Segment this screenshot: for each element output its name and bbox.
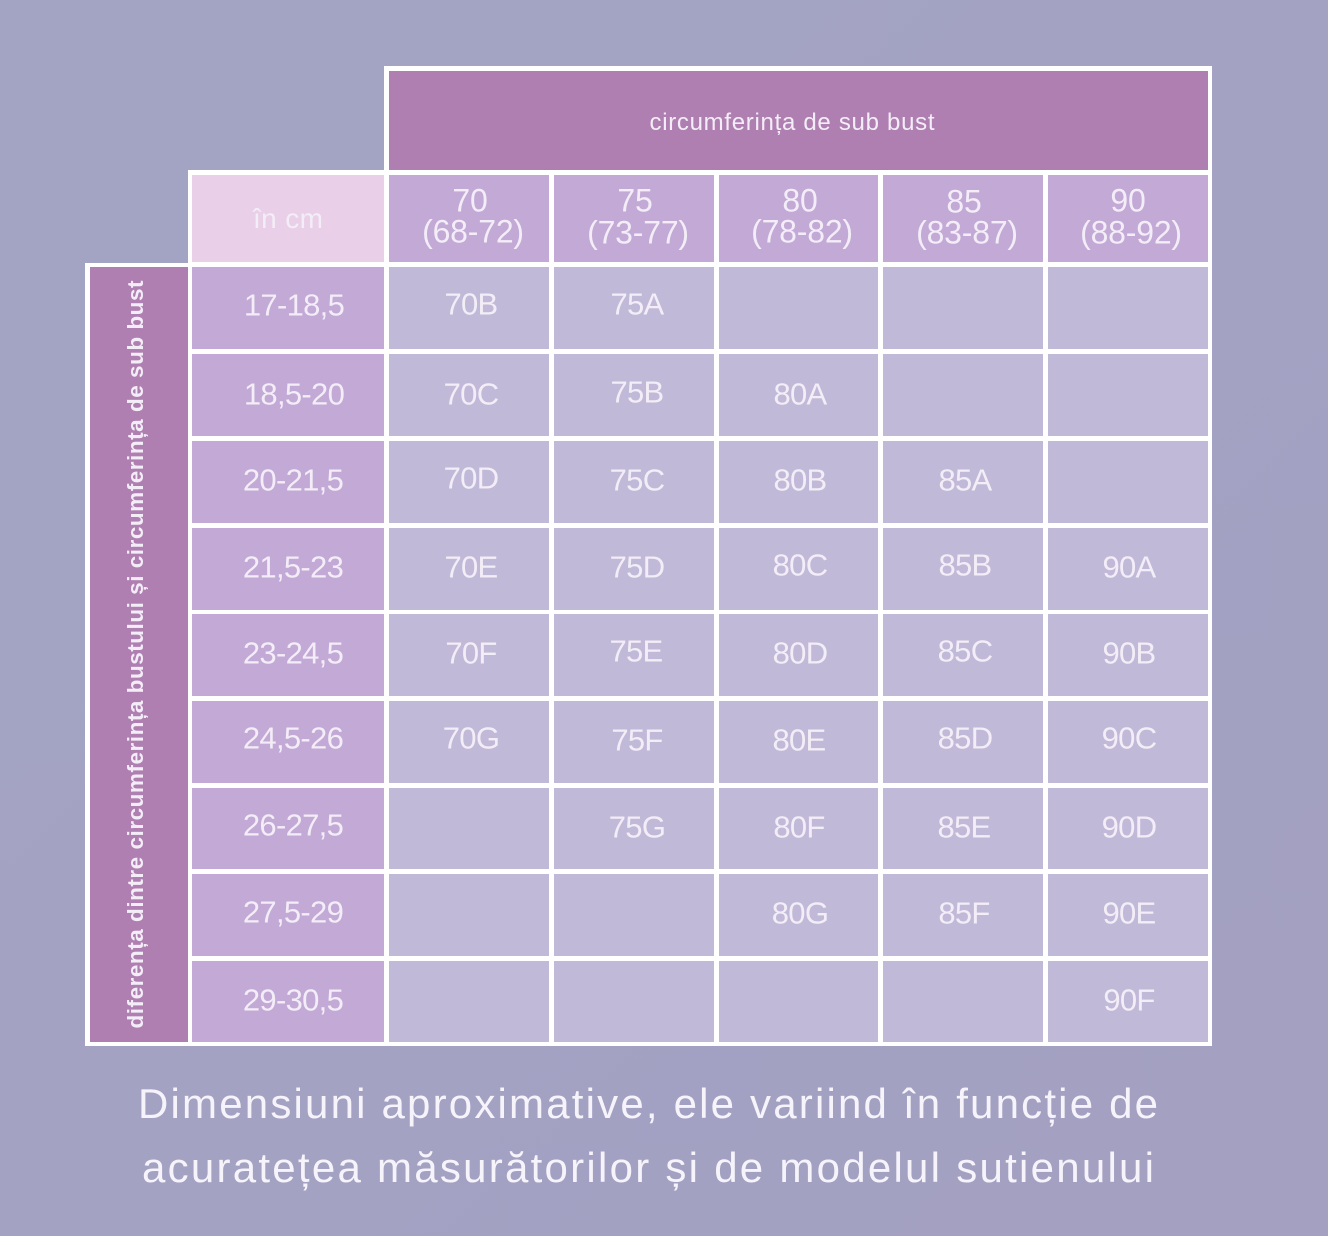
row 29-30,5: [192, 961, 1208, 1042]
corner cell: în cm: [192, 175, 384, 262]
row 17-18,5: 70B: [444, 286, 498, 321]
header: circumferința de sub bust: circumferința de sub bust: [650, 109, 935, 136]
row 24,5-26: 85D: [938, 720, 992, 755]
row 21,5-23: 75D: [610, 549, 664, 584]
row 20-21,5: [192, 441, 1208, 523]
column header: 70: (68-72): [422, 213, 524, 249]
row 21,5-23: 90A: [1102, 549, 1157, 584]
column header: 85: 85: [946, 183, 982, 219]
column header: 80: (78-82): [751, 213, 853, 249]
column header: 85: [883, 175, 1043, 262]
corner cell: în cm: în cm: [252, 203, 323, 234]
side header: diferența dintre circumferința bustului și circumferința de sub bust: diferența dintre circumferința bustului și circumferința de sub bust: [123, 280, 148, 1028]
row 24,5-26: 24,5-26: [243, 720, 343, 755]
column header: 75: (73-77): [587, 214, 689, 250]
row 18,5-20: 75B: [610, 374, 664, 409]
row 23-24,5: 23-24,5: [243, 635, 343, 670]
row 23-24,5: 85C: [938, 633, 993, 668]
row 18,5-20: 18,5-20: [244, 376, 345, 411]
row 17-18,5: 75A: [610, 286, 665, 321]
side header: diferența dintre circumferința bustului și circumferința de sub bust: [90, 267, 188, 1042]
column header: 70: 70: [452, 182, 488, 218]
row 21,5-23: 85B: [938, 547, 992, 582]
header: circumferința de sub bust: [389, 71, 1208, 170]
row 18,5-20: 70C: [444, 376, 499, 411]
row 27,5-29: 85F: [938, 895, 990, 930]
row 23-24,5: [192, 614, 1208, 696]
row 26-27,5: 26-27,5: [243, 807, 343, 842]
column header: 80: 80: [782, 182, 818, 218]
row 26-27,5: 80F: [773, 809, 825, 844]
row 29-30,5: 90F: [1103, 982, 1155, 1017]
row 23-24,5: 90B: [1102, 635, 1156, 670]
row 27,5-29: 90E: [1102, 895, 1156, 930]
row 26-27,5: 90D: [1102, 809, 1156, 844]
row 24,5-26: 80E: [772, 722, 826, 757]
row 27,5-29: 80G: [772, 895, 828, 930]
column header: 90: [1048, 175, 1208, 262]
row 24,5-26: 90C: [1102, 720, 1157, 755]
row 21,5-23: 70E: [444, 549, 498, 584]
column header: 90: (88-92): [1080, 214, 1182, 250]
row 21,5-23: 80C: [773, 547, 828, 582]
row 20-21,5: 80B: [773, 462, 827, 497]
column header: 85: (83-87): [916, 214, 1018, 250]
row 23-24,5: 75E: [609, 633, 663, 668]
row 26-27,5: 75G: [609, 809, 665, 844]
row 18,5-20: 80A: [773, 376, 828, 411]
row 20-21,5: 75C: [610, 462, 665, 497]
column header: 90: 90: [1110, 182, 1146, 218]
row 20-21,5: 70D: [444, 460, 498, 495]
row 24,5-26: 75F: [611, 722, 663, 757]
row 23-24,5: 80D: [773, 635, 827, 670]
row 27,5-29: [192, 874, 1208, 956]
row 17-18,5: [192, 267, 1208, 349]
row 20-21,5: 85A: [938, 462, 993, 497]
row 20-21,5: 20-21,5: [243, 462, 343, 497]
row 18,5-20: [192, 354, 1208, 436]
column header: 75: 75: [617, 182, 653, 218]
row 21,5-23: 21,5-23: [243, 549, 343, 584]
row 21,5-23: [192, 528, 1208, 610]
footnote: acuratețea măsurătorilor și de modelul sutienului: [142, 1144, 1154, 1191]
row 17-18,5: 17-18,5: [244, 287, 344, 322]
footnote: Dimensiuni aproximative, ele variind în funcție de: [138, 1080, 1158, 1127]
row 29-30,5: 29-30,5: [243, 982, 343, 1017]
row 24,5-26: [192, 701, 1208, 783]
column header: 80: [719, 175, 878, 262]
footnote: [138, 1080, 1158, 1191]
row 23-24,5: 70F: [445, 635, 497, 670]
column header: 75: [554, 175, 714, 262]
row 26-27,5: 85E: [937, 809, 991, 844]
row 27,5-29: 27,5-29: [243, 894, 343, 929]
row 26-27,5: [192, 788, 1208, 869]
row 24,5-26: 70G: [443, 720, 499, 755]
column header: 70: [389, 175, 549, 262]
